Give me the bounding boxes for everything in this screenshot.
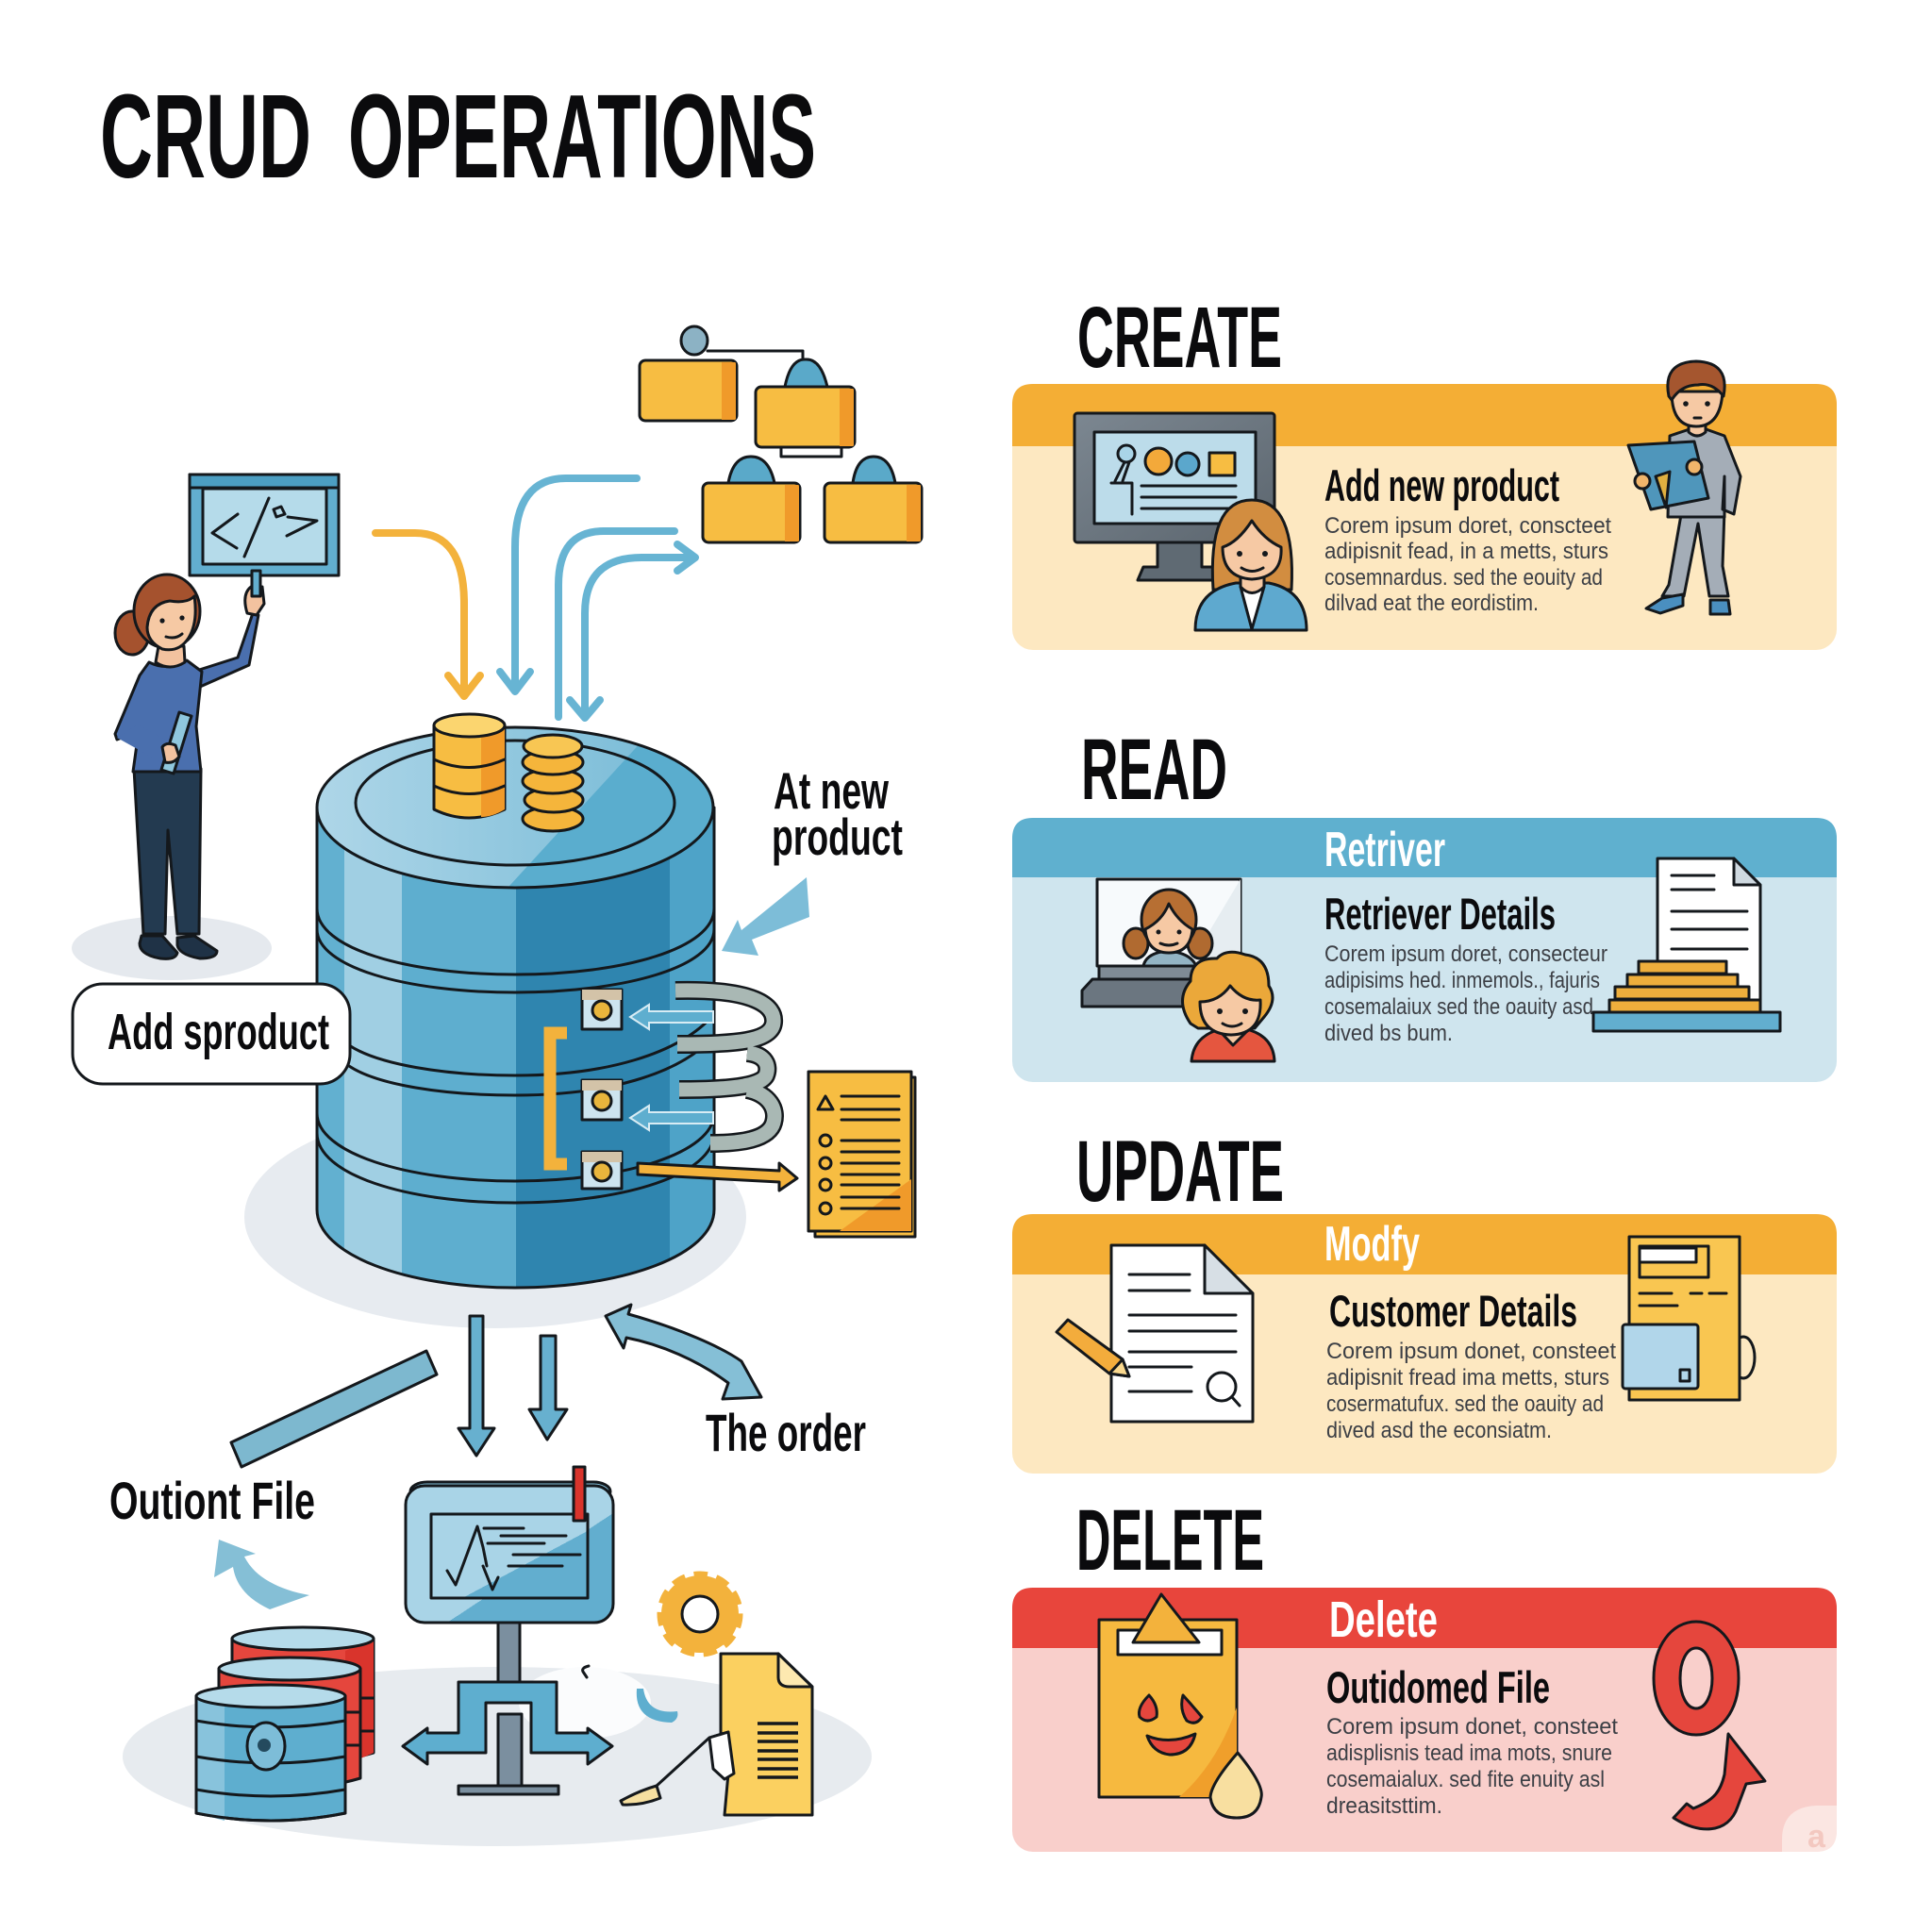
icon: red return arrow: [1674, 1734, 1765, 1829]
header label: retriver: Retriver: [1324, 823, 1445, 877]
hair and face: [134, 575, 200, 648]
text: update details: Customer Details: [1329, 1286, 1577, 1336]
connector hooks: [675, 991, 774, 1143]
text: update details: adipisnit fread ima metts, sturs: [1326, 1365, 1609, 1391]
panel: read: [1012, 722, 1837, 1082]
label: at new product: [772, 761, 903, 866]
tier bands: [317, 908, 714, 974]
text: update details: dived asd the econsiatm.: [1326, 1418, 1552, 1443]
handheld tool: [161, 712, 192, 774]
text: create details: adipisnit fead, in a metts, sturs: [1324, 539, 1608, 564]
text: create details: dilvad eat the eordistim.: [1324, 591, 1539, 616]
ground highlight: [519, 1667, 651, 1739]
text: read details: dived bs bum.: [1324, 1021, 1453, 1046]
label: outiont file: Outiont File: [109, 1471, 315, 1530]
text: create details: [1324, 460, 1611, 616]
icon: monitor on network post: [403, 1467, 613, 1794]
ponytail: [115, 611, 149, 655]
text: read details: Corem ipsum doret, consecteur: [1324, 941, 1607, 967]
icon: folder hierarchy: [640, 326, 922, 542]
text: read details: adipisims hed. inmemols., fajuris: [1324, 968, 1600, 993]
card header bar: [1012, 384, 1837, 446]
panel: database diagram: [72, 326, 922, 1846]
icon: clipboard with face: [1099, 1594, 1261, 1818]
text: update details: [1326, 1286, 1616, 1443]
figure: woman pointing at code window: [115, 571, 264, 958]
title: CRUD: [100, 70, 311, 203]
text: delete details: [1326, 1662, 1618, 1819]
figure: curly haired child: [1183, 952, 1274, 1061]
database cylinder: [311, 717, 714, 1288]
callout: add sproduct: [73, 984, 350, 1084]
icon: red zero: [1654, 1622, 1739, 1735]
heading: update: UPDATE: [1076, 1124, 1284, 1220]
icon: file with broom: [621, 1654, 812, 1815]
icon: output document: [808, 1072, 915, 1237]
legs: [134, 769, 201, 934]
text: create details: Add new product: [1324, 460, 1559, 510]
coin stack tall: [434, 714, 505, 818]
heading: read: READ: [1081, 722, 1227, 818]
bracket: [550, 1033, 567, 1164]
label: the order: The order: [706, 1403, 866, 1462]
text: read details: Retriever Details: [1324, 889, 1556, 939]
card background: [1012, 818, 1837, 1082]
arrow: blue double-headed: [570, 544, 695, 718]
panel: create: [1012, 290, 1837, 650]
arrow: curved left: [214, 1540, 309, 1609]
arrow: diagonal bar: [231, 1351, 437, 1467]
text: read details: [1324, 889, 1607, 1046]
watermark: a: [1807, 1819, 1826, 1855]
icon: document with pencil: [1057, 1245, 1253, 1422]
text: read details: cosemalaiux sed the oauity asd: [1324, 994, 1593, 1020]
header label: modfy: Modfy: [1324, 1217, 1420, 1272]
card background: [1012, 1214, 1837, 1474]
text: delete details: dreasitsttim.: [1326, 1793, 1442, 1819]
title: [100, 70, 816, 203]
text: create details: Corem ipsum doret, conscteet: [1324, 513, 1611, 539]
icon: laptop with girl: [1082, 879, 1241, 1007]
icon: hook: [583, 1666, 589, 1677]
callout: add sproduct: Add sproduct: [108, 1004, 329, 1060]
network arrows: [403, 1682, 612, 1764]
top ellipse: [317, 727, 713, 888]
icon: crescent: [637, 1689, 677, 1723]
watermark: [1782, 1806, 1837, 1855]
arrow: plug input two: [630, 1106, 713, 1130]
arrow: down one: [458, 1316, 494, 1456]
text: delete details: Corem ipsum donet, consteet: [1326, 1714, 1618, 1740]
figure: woman with blue jacket: [1195, 500, 1307, 630]
card header bar: [1012, 1214, 1837, 1274]
card background: [1012, 384, 1837, 650]
figure shadow: [72, 916, 272, 980]
text: update details: Corem ipsum donet, consteet: [1326, 1339, 1616, 1364]
title: OPERATIONS: [348, 70, 816, 203]
panel: update: [1012, 1124, 1837, 1474]
icon: document on stacked steps: [1593, 858, 1780, 1031]
text: delete details: cosemaialux. sed fite enuity asl: [1326, 1767, 1605, 1792]
panel: delete: [1012, 1492, 1837, 1855]
heading: delete: DELETE: [1076, 1492, 1264, 1589]
torso with bent arm: [115, 660, 202, 772]
icon: monitor with product icons: [1074, 413, 1274, 580]
raised arm: [193, 613, 258, 687]
icon: stacked database cylinders: [196, 1627, 374, 1821]
header label: delete: Delete: [1329, 1591, 1438, 1648]
figure: boy with board: [1628, 361, 1740, 614]
shoes: [140, 936, 177, 958]
database shadow: [244, 1106, 746, 1328]
card header bar: [1012, 818, 1837, 877]
ground ellipse: [123, 1667, 872, 1846]
arrow: orange into database: [375, 533, 480, 696]
icon: gear: [661, 1575, 739, 1653]
arrow: curved double: [606, 1305, 761, 1399]
icon: connector plugs: [582, 990, 622, 1189]
neck: [156, 646, 185, 667]
coin stack small: [523, 735, 583, 831]
text: update details: cosermatufux. sed the oauity ad: [1326, 1391, 1604, 1417]
text: delete details: Outidomed File: [1326, 1662, 1550, 1712]
label: at new product: At new: [774, 761, 889, 820]
card header bar: [1012, 1588, 1837, 1648]
icon: code window: [190, 475, 339, 575]
label: at new product: product: [772, 808, 903, 866]
arrow: blue up from database: [558, 531, 675, 717]
arrow: blue into database: [500, 478, 637, 691]
arrow: down two: [529, 1336, 567, 1440]
arrow: orange output: [638, 1163, 797, 1191]
arrow: plug input one: [630, 1005, 713, 1029]
card background: [1012, 1588, 1837, 1852]
text: create details: cosemnardus. sed the eouity ad: [1324, 565, 1603, 591]
heading: create: CREATE: [1077, 290, 1282, 386]
arrow: at new product pointer: [722, 877, 809, 956]
text: delete details: adisplisnis tead ima mots, snure: [1326, 1740, 1612, 1766]
icon: customer card: [1623, 1237, 1755, 1400]
